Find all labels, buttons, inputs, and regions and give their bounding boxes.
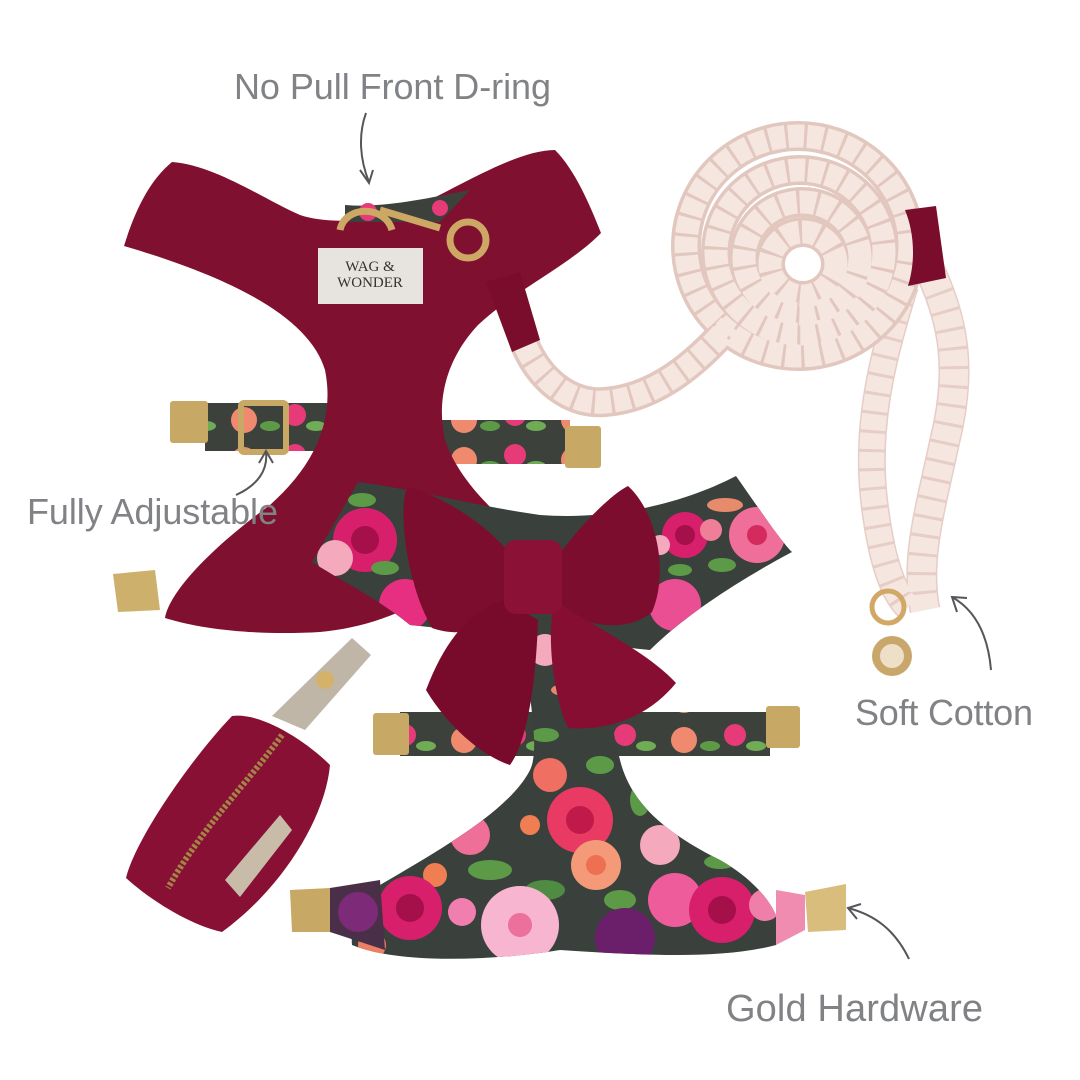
- poop bag holder: [126, 638, 371, 932]
- brand tag: WAG &: [345, 259, 395, 275]
- leash clip: [872, 591, 912, 676]
- rope: coil base: [525, 136, 910, 402]
- rope: lower strands twists: [872, 260, 954, 610]
- label: Soft Cotton: Soft Cotton: [855, 692, 1033, 733]
- brand tag: [318, 248, 423, 304]
- floral edge top harness: [345, 190, 470, 222]
- leash handle wrap: [486, 272, 540, 352]
- harness straps top: [170, 401, 601, 468]
- brand tag: WONDER: [337, 275, 403, 291]
- rope: lower strands base: [872, 260, 954, 610]
- arrow: adjustable: [236, 451, 273, 495]
- label: Gold Hardware: Gold Hardware: [726, 988, 983, 1030]
- rope: loop into D clip: [489, 250, 500, 295]
- leash rope: [489, 136, 954, 610]
- bottom buckles: [290, 884, 846, 932]
- leash wrap: [905, 206, 946, 286]
- bottom wing ends: [330, 880, 805, 950]
- bow: [403, 486, 676, 765]
- label: Fully Adjustable: Fully Adjustable: [27, 491, 278, 532]
- arrow: hardware: [848, 904, 909, 959]
- burgundy harness: [124, 150, 601, 633]
- arrow: D-ring: [360, 113, 373, 183]
- rope: coil twists: [525, 136, 910, 402]
- front buckle left: [113, 570, 160, 612]
- floral harness bottom: [352, 634, 776, 959]
- label: No Pull Front D-ring: No Pull Front D-ring: [234, 66, 551, 107]
- D-ring hardware: [340, 210, 486, 258]
- floral harness top: [312, 476, 792, 650]
- arrow: cotton: [952, 597, 991, 670]
- floral straps bottom: [373, 706, 800, 756]
